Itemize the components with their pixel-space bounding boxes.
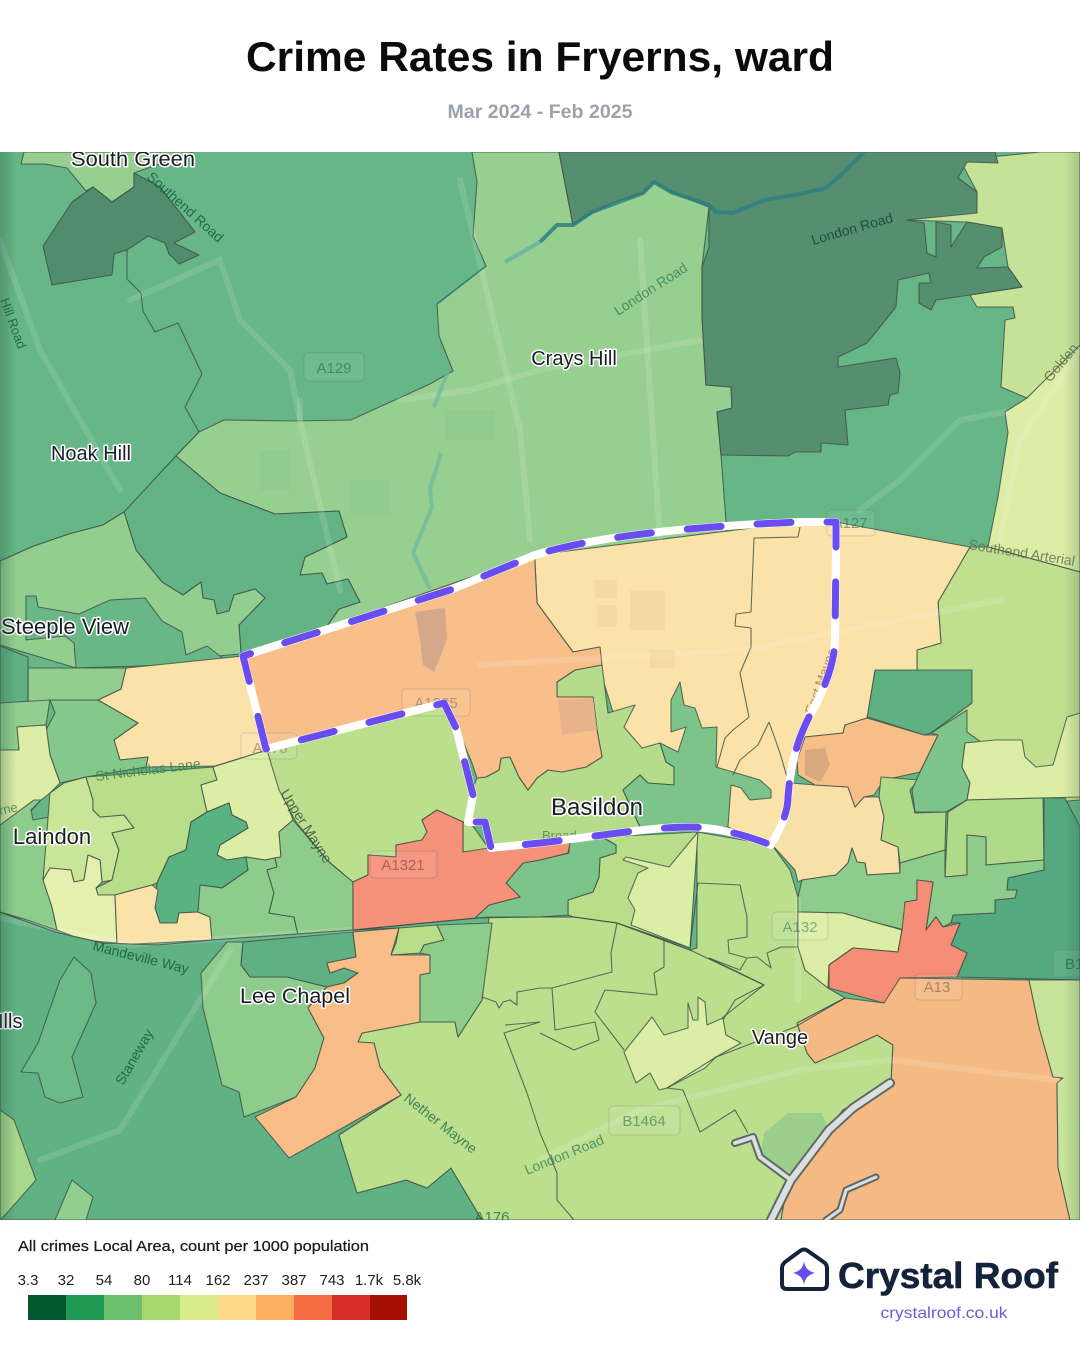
place labels [0,148,808,1049]
road labels: A132 [782,919,818,936]
title: Crime Rates in Fryerns, ward [246,33,834,80]
legend labels: 1.7k [355,1272,384,1289]
road labels: Staneway [112,1026,156,1088]
road labels: Mandeville Way [91,937,191,977]
creek [735,1083,890,1220]
region: Steeple View patch [26,596,224,668]
place labels: Noak Hill [51,443,131,465]
road labels: St Nicholas Lane [94,755,202,784]
choropleth map [0,148,1080,1226]
road labels: Southend Road [144,168,227,245]
region: A13 red [829,880,967,1003]
legend labels: 80 [134,1272,150,1289]
road labels: London Road [522,1131,606,1178]
road labels: A176 [474,1209,510,1226]
legend labels: 387 [281,1272,307,1289]
road labels: Southend Arterial [968,536,1076,569]
road labels: A127 [832,515,868,532]
region: lower centre base [339,832,893,1220]
legend labels: 5.8k [393,1272,422,1289]
region: east pale band [988,340,1080,572]
river [413,152,864,589]
road labels: A13 [924,979,950,996]
marsh [760,1113,829,1173]
region: far left pale [0,725,60,825]
road labels: A129 [316,360,352,377]
road labels: B1464 [622,1113,666,1130]
map edge fade [0,152,1080,1220]
legend labels: 237 [243,1272,269,1289]
region: east mid band [798,835,1044,930]
region: top dark woodland [559,152,1022,456]
region: Vange orange [781,978,1070,1220]
legend labels: 743 [319,1272,345,1289]
region: South Green dark patch [43,173,199,285]
legend labels: 54 [96,1272,112,1289]
region: Laindon peach [115,885,212,945]
region: far east dark [951,798,1080,980]
region: Laindon blocks [43,777,134,882]
legend labels: 162 [205,1272,231,1289]
region: south centre blocks [568,832,697,948]
legend title: All crimes Local Area, count per 1000 population [18,1238,369,1255]
legend labels [18,1272,422,1289]
building blocks [260,410,675,668]
region: Crays Hill [176,152,732,629]
region: A1321 red [353,810,570,930]
website url: crystalroof.co.uk [880,1305,1009,1322]
region: top right pale [907,152,1080,398]
road labels: Broad [542,828,577,843]
road labels: A1325 [414,695,458,712]
place labels: Steeple View [1,614,129,639]
place labels: Vange [752,1027,808,1049]
roads [0,180,1080,1160]
place labels: Basildon [551,794,643,821]
subtitle: date range: Mar 2024 - Feb 2025 [448,102,633,123]
region: South Green pale [21,152,193,202]
region: Lee Chapel green [201,942,327,1117]
region: south-west dark [0,912,482,1220]
south boundary lines [0,883,845,1220]
road labels: Upper Mayne [277,786,336,866]
road labels: East Mayne [802,646,839,716]
region: Laindon dark patch [155,803,248,923]
region: ward orange [243,555,602,790]
region: west peach [98,656,267,767]
place labels: Lee Chapel [240,984,350,1008]
region: east peach lower [774,783,900,882]
region: west green [124,456,360,654]
region: east small greens [879,777,946,863]
road labels: A1321 [381,857,425,874]
road labels: Nether Mayne [401,1090,480,1157]
region: Vange pale [624,997,741,1090]
road shields [241,353,1080,1135]
region: dark east block [867,670,972,735]
region: west light band [0,512,265,668]
place labels: Crays Hill [531,348,617,370]
logo wordmark: Crystal Roof [838,1255,1059,1296]
region: A132 pale [798,912,902,988]
region: Upper Mayne park [267,703,473,882]
legend labels: 32 [58,1272,74,1289]
legend labels: 114 [168,1272,192,1289]
legend labels: 3.3 [18,1272,38,1289]
road labels: A176 [252,740,288,757]
region: green south of Laindon [198,857,298,940]
road labels: London Road [611,259,690,319]
place labels: Laindon [13,824,91,849]
road labels: London Road [809,209,895,248]
region: Lee Chapel orange [255,928,430,1158]
region: ward pale green [470,665,674,850]
region: east orange [797,718,938,807]
region boundary: Noak Hill [0,250,202,561]
ward boundary: Fryerns [243,522,836,848]
icon: Crystal Roof house logo [782,1250,827,1289]
region: green finger [623,682,771,827]
road labels [0,168,1080,1226]
legend colour scale [28,1295,407,1320]
ward inner boundaries [717,527,800,767]
region: very pale Laindon [43,855,117,943]
region: ward peach [535,522,970,847]
place labels: South Green [71,148,195,171]
region: left mid green [46,700,148,783]
region: east green pale [917,547,1080,810]
